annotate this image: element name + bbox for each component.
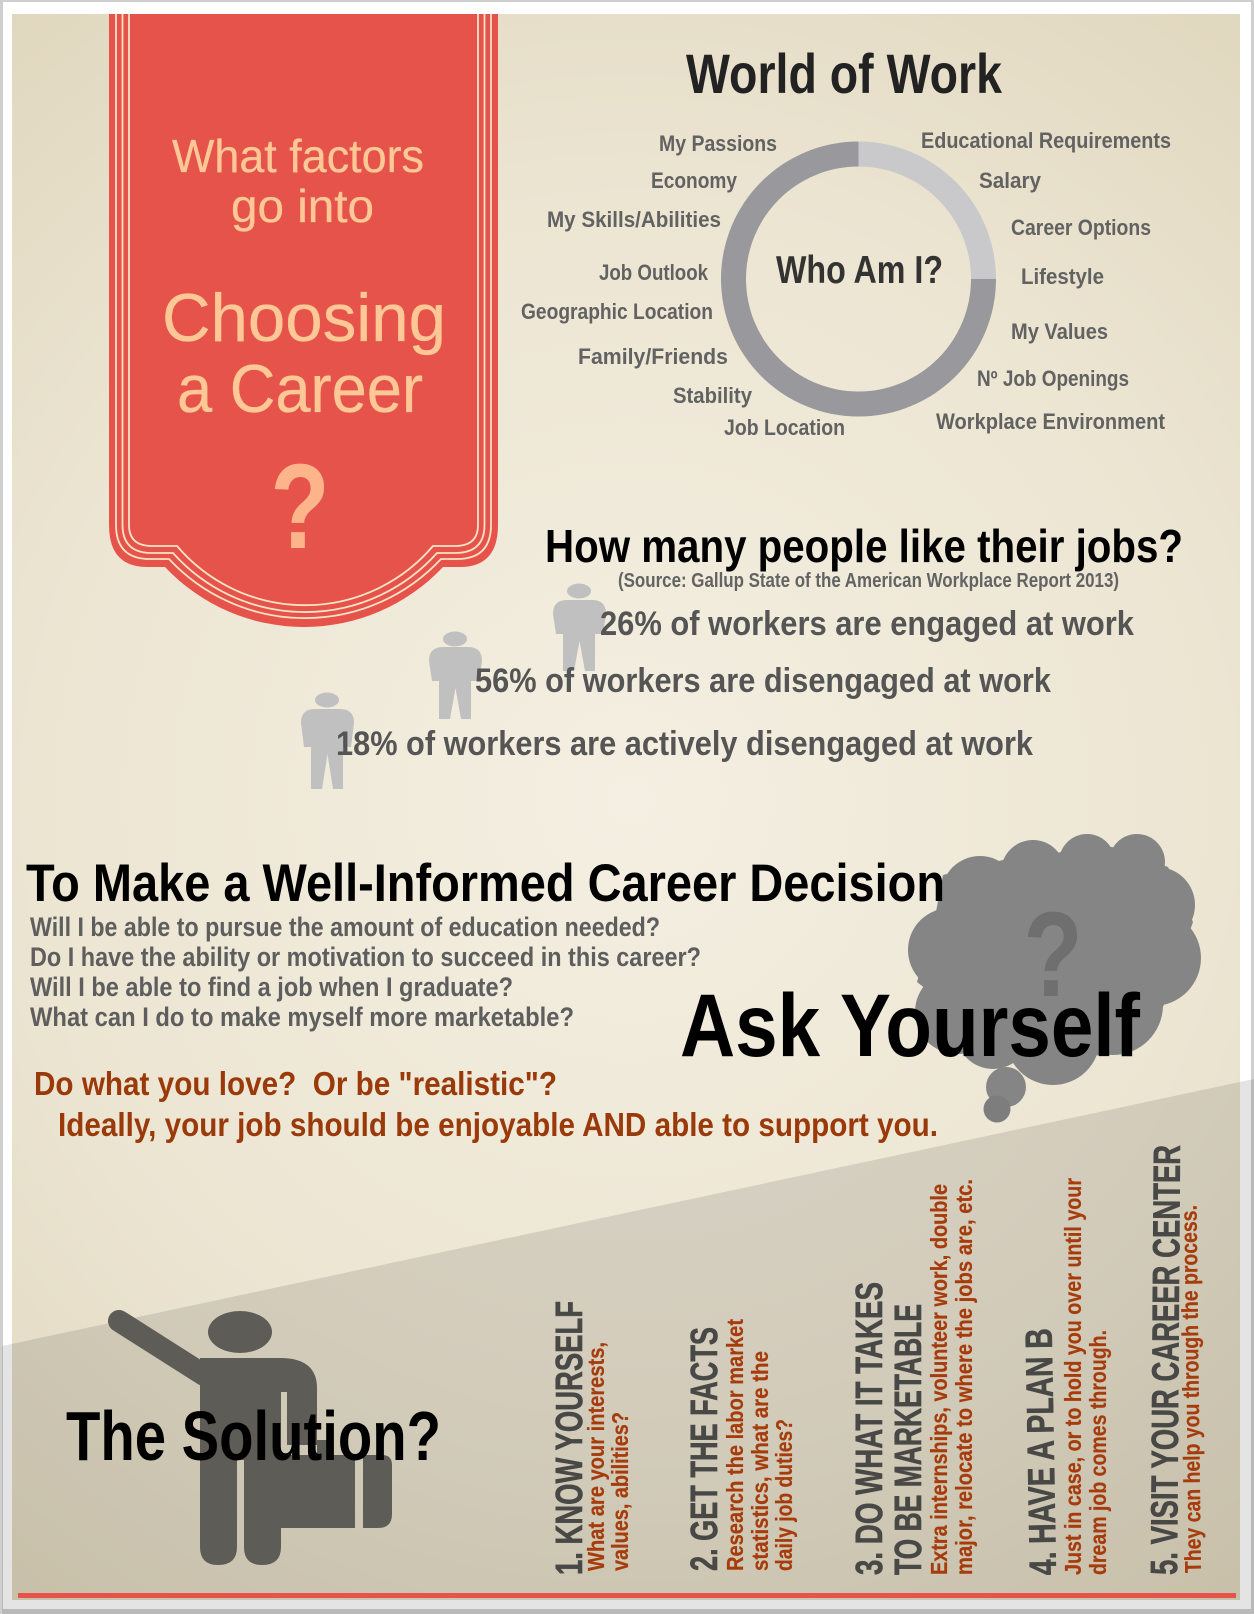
step 5: visit your career center: 5. VISIT YOUR CAREER CENTER xyxy=(1144,1145,1189,1575)
stat: actively disengaged: 18% of workers are actively disengaged at work xyxy=(336,725,1033,763)
step 3: do what it takes: major, relocate to where the jobs are, etc. xyxy=(951,1179,977,1575)
question list: What can I do to make myself more marketable? xyxy=(30,1002,574,1032)
step 3: do what it takes: TO BE MARKETABLE xyxy=(888,1304,930,1575)
banner inner lines xyxy=(116,14,491,618)
step 5: visit your career center: They can help you through the process. xyxy=(1176,1205,1206,1573)
step 2: get the facts xyxy=(684,1319,797,1571)
donut labels: Educational Requirements xyxy=(921,128,1171,153)
question list: Do I have the ability or motivation to succeed in this career? xyxy=(30,942,701,972)
donut labels: Stability xyxy=(673,383,753,408)
donut labels: My Values xyxy=(1011,319,1108,344)
donut light segment xyxy=(858,142,996,279)
banner shape xyxy=(109,14,498,627)
step 1: know yourself xyxy=(549,1301,633,1575)
heading: the solution: The Solution? xyxy=(66,1397,441,1475)
donut labels: Workplace Environment xyxy=(936,409,1166,434)
donut labels: Job Outlook xyxy=(599,260,709,285)
callout: do what you love: Ideally, your job should be enjoyable AND able to support you. xyxy=(58,1106,938,1143)
panel: how many people like their jobs xyxy=(301,520,1183,789)
heading: how many people: How many people like their jobs? xyxy=(545,520,1183,572)
step 1: know yourself: values, abilities? xyxy=(607,1412,633,1571)
panel: banner xyxy=(109,14,498,627)
diagonal solution panel xyxy=(2,1079,1254,1614)
banner question mark: ? xyxy=(270,440,330,574)
cloud question mark: ? xyxy=(1023,888,1083,1022)
banner heading: go into xyxy=(231,180,374,232)
banner heading xyxy=(162,130,446,427)
source note: (Source: Gallup State of the American Workplace Report 2013) xyxy=(618,570,1119,592)
donut dark segment xyxy=(721,142,996,416)
donut labels: Salary xyxy=(979,168,1042,193)
stat: disengaged: 56% of workers are disengaged at work xyxy=(475,662,1051,700)
donut labels: Lifestyle xyxy=(1021,264,1104,289)
stat: engaged: 26% of workers are engaged at work xyxy=(600,605,1134,643)
step 3: do what it takes: 3. DO WHAT IT TAKES xyxy=(849,1282,891,1575)
step 1: know yourself: 1. KNOW YOURSELF xyxy=(549,1301,591,1575)
step 4: have a plan b xyxy=(1019,1178,1111,1576)
step 2: get the facts: statistics, what are the xyxy=(747,1351,773,1571)
step 4: have a plan b: 4. HAVE A PLAN B xyxy=(1019,1328,1065,1576)
step 4: have a plan b: Just in case, or to hold you over until your xyxy=(1060,1178,1086,1575)
banner heading: a Career xyxy=(177,351,423,427)
question list: Will I be able to pursue the amount of education needed? xyxy=(30,912,660,942)
icon: thought cloud xyxy=(908,834,1201,1122)
donut labels: Family/Friends xyxy=(578,344,728,369)
icon: man with briefcase xyxy=(119,1311,392,1565)
heading: ask yourself: Ask Yourself xyxy=(680,975,1140,1075)
banner heading: Choosing xyxy=(162,280,446,356)
donut labels: Nº Job Openings xyxy=(977,366,1129,391)
title: world of work: World of Work xyxy=(686,42,1003,105)
donut labels: My Skills/Abilities xyxy=(547,207,721,232)
heading: well-informed decision: To Make a Well-Informed Career Decision xyxy=(26,854,945,913)
callout: do what you love: Do what you love? Or be "realistic"? xyxy=(34,1065,557,1102)
donut labels: Economy xyxy=(651,168,738,193)
step 5: visit your career center xyxy=(1144,1145,1206,1575)
step 2: get the facts: Research the labor market xyxy=(722,1319,748,1571)
icon: person 3 xyxy=(301,692,354,789)
donut labels xyxy=(521,128,1171,440)
donut labels: Job Location xyxy=(724,415,845,440)
step 3: do what it takes xyxy=(849,1179,977,1575)
step 3: do what it takes: Extra internships, volunteer work, double xyxy=(926,1184,952,1575)
step 1: know yourself: What are your interests, xyxy=(583,1342,609,1571)
icon: person 1 xyxy=(553,584,606,671)
donut labels: Geographic Location xyxy=(521,299,713,324)
step 4: have a plan b: dream job comes through. xyxy=(1085,1330,1111,1575)
question list xyxy=(30,912,701,1032)
step 2: get the facts: 2. GET THE FACTS xyxy=(684,1327,726,1571)
donut labels: My Passions xyxy=(659,131,777,156)
step 2: get the facts: daily job duties? xyxy=(771,1419,797,1571)
question list: Will I be able to find a job when I graduate? xyxy=(30,972,513,1002)
icon: person 2 xyxy=(429,632,482,719)
donut centre label: Who Am I? xyxy=(776,249,943,292)
callout: do what you love xyxy=(34,1065,938,1143)
red bottom rule xyxy=(18,1593,1236,1598)
banner heading: What factors xyxy=(172,130,424,182)
donut chart xyxy=(721,142,996,416)
donut labels: Career Options xyxy=(1011,215,1151,240)
